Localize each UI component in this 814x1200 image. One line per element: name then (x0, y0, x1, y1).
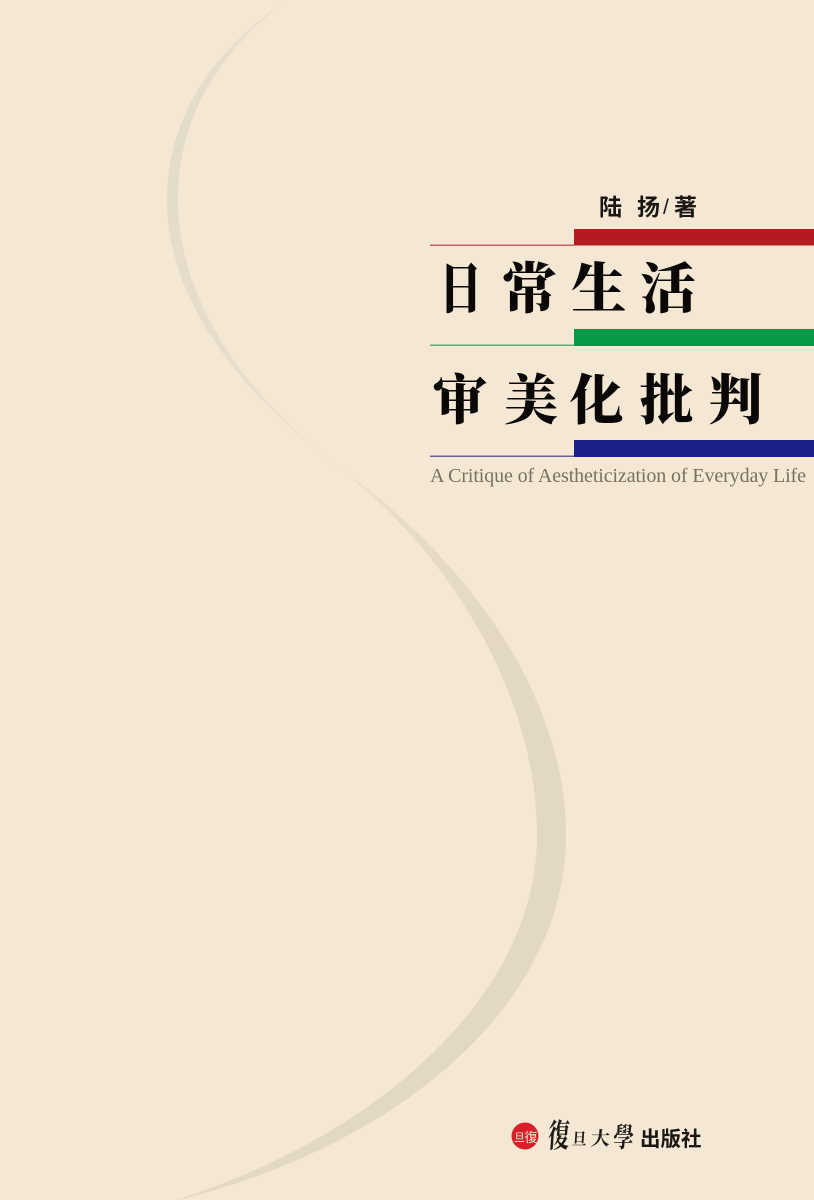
author: 陆 (599, 194, 622, 220)
green rule (430, 329, 814, 346)
decorative S curve (167, 0, 566, 1200)
title line 2: 化 (570, 371, 624, 431)
publisher suffix: 出版社 (640, 1128, 702, 1151)
title line 2: 批 (640, 371, 694, 431)
publisher calligraphy name: 學 (611, 1123, 635, 1154)
title line 1: 活 (640, 259, 696, 320)
icon: red seal (512, 1122, 538, 1150)
title line 1: 常 (502, 259, 557, 320)
blue rule (430, 440, 814, 457)
author: 扬 (637, 194, 660, 220)
author: / (663, 196, 669, 219)
publisher logo (512, 1117, 702, 1154)
icon: red seal: 旦 (514, 1132, 525, 1144)
title line 1 (439, 259, 696, 320)
publisher calligraphy name: 復 (547, 1117, 571, 1154)
author (599, 194, 697, 220)
title line 2: 审 (433, 371, 487, 431)
publisher calligraphy name: 大 (590, 1128, 611, 1150)
title line 2: 判 (708, 371, 762, 431)
publisher calligraphy name (547, 1117, 635, 1154)
title line 1: 生 (571, 259, 627, 320)
publisher calligraphy name: 旦 (571, 1130, 587, 1149)
icon: red seal: 復 (524, 1130, 538, 1145)
title line 1: 日 (439, 259, 482, 320)
English subtitle: A Critique of Aestheticization of Everyday Life (430, 465, 806, 487)
title line 2 (433, 371, 762, 431)
author: 著 (674, 194, 697, 220)
title line 2: 美 (504, 371, 558, 431)
red rule (430, 229, 814, 246)
